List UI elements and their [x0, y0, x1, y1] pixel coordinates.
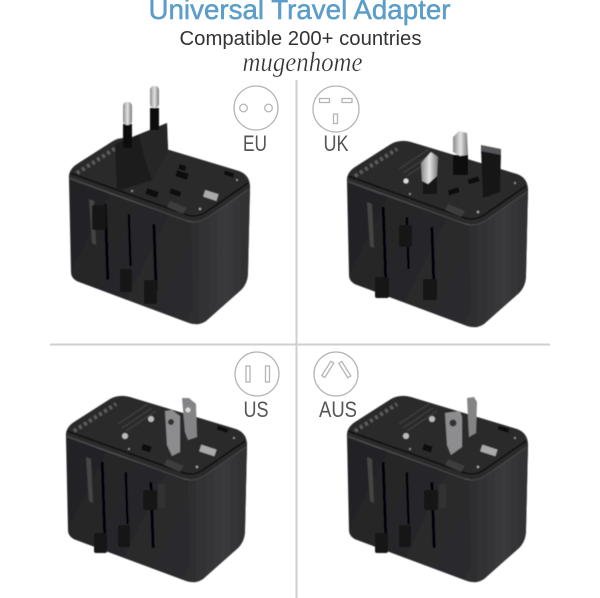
panel: UK: [313, 86, 528, 327]
icon: US socket: [235, 352, 279, 396]
adapter with AUS plug: [347, 396, 528, 582]
icon: UK socket: [313, 86, 359, 132]
adapter with EU plug: [69, 86, 250, 324]
brand signature: mugenhome: [242, 47, 363, 77]
adapter with UK plug: [347, 131, 528, 327]
label: UK: UK: [324, 131, 349, 156]
icon: AUS socket: [314, 352, 358, 396]
vertical divider: [296, 80, 298, 598]
panel: AUS: [314, 352, 528, 582]
icon: EU socket: [234, 86, 278, 130]
panel: EU: [69, 86, 278, 324]
panel: US: [66, 352, 279, 582]
adapter with US plug: [66, 396, 247, 582]
subtitle: Compatible 200+ countries: [180, 28, 422, 50]
label: US: US: [244, 397, 268, 422]
label: AUS: AUS: [319, 397, 357, 422]
horizontal divider: [50, 344, 550, 346]
label: EU: EU: [243, 131, 267, 156]
